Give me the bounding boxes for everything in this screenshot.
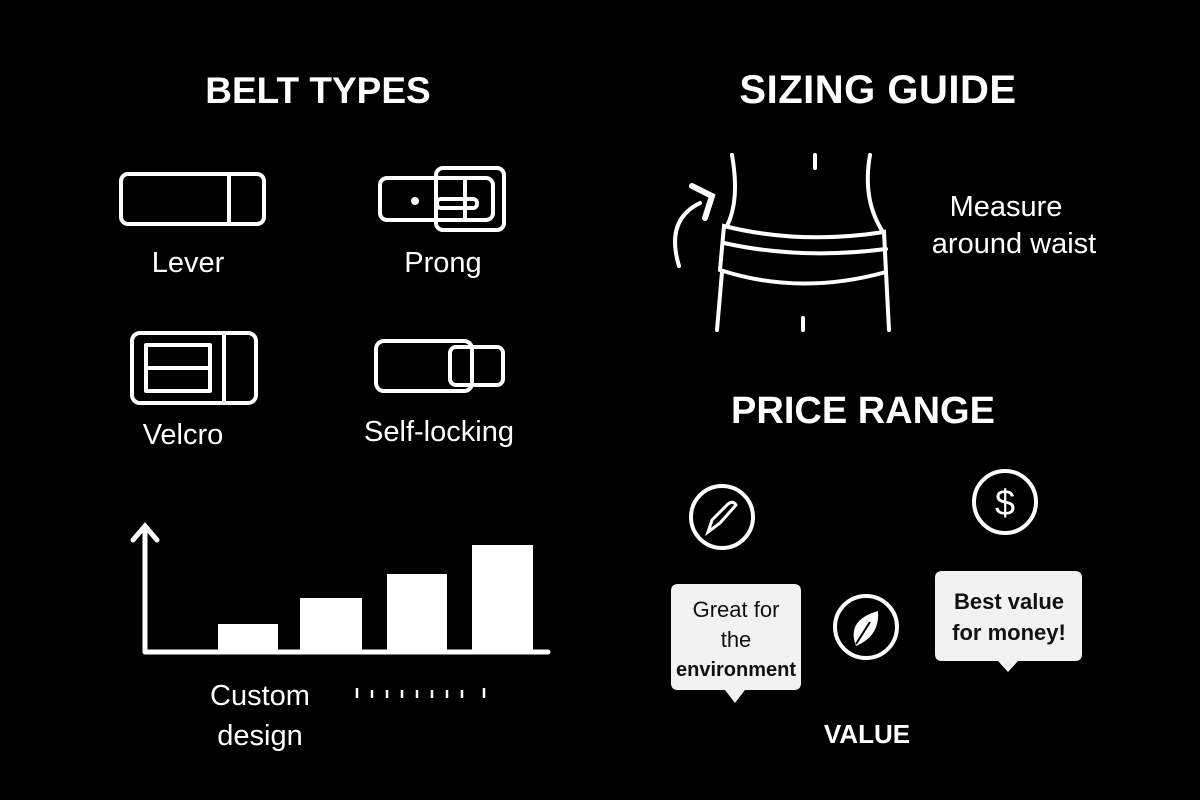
- label: self-locking: Self-locking: [364, 416, 514, 448]
- callout: environment: environment: [676, 659, 796, 681]
- callout: environment: Great for: [693, 597, 779, 622]
- callout: best value: [935, 571, 1082, 672]
- icon: self-locking: [376, 341, 503, 391]
- text: around waist: [932, 228, 1096, 260]
- chart label: Custom: [210, 680, 310, 712]
- label: velcro: Velcro: [143, 419, 223, 451]
- text: design: [217, 720, 303, 752]
- icon: lever: [121, 174, 264, 224]
- icon: prong: [380, 168, 504, 230]
- title: sizing guide: SIZING GUIDE: [739, 68, 1017, 112]
- label: prong: Prong: [404, 247, 482, 279]
- callout: environment: the: [721, 627, 751, 652]
- icon: dollar: [974, 471, 1036, 533]
- callout: best value: for money!: [952, 620, 1066, 645]
- title: belt types: BELT TYPES: [205, 70, 431, 111]
- tick marks: [357, 688, 484, 698]
- icon: velcro: [132, 333, 256, 403]
- label: value: VALUE: [824, 719, 910, 749]
- icon: dollar: $: [995, 482, 1015, 523]
- text: measure: Measure: [950, 191, 1062, 223]
- icon: waist: [675, 155, 889, 330]
- callout: best value: Best value: [954, 589, 1064, 614]
- icon: leaf: [835, 596, 897, 658]
- panel: belt types: [121, 168, 504, 403]
- callout: environment: [671, 584, 801, 703]
- bar chart: [133, 526, 548, 652]
- title: price range: PRICE RANGE: [731, 390, 995, 432]
- icon: pencil: [691, 486, 753, 548]
- label: lever: Lever: [152, 247, 225, 279]
